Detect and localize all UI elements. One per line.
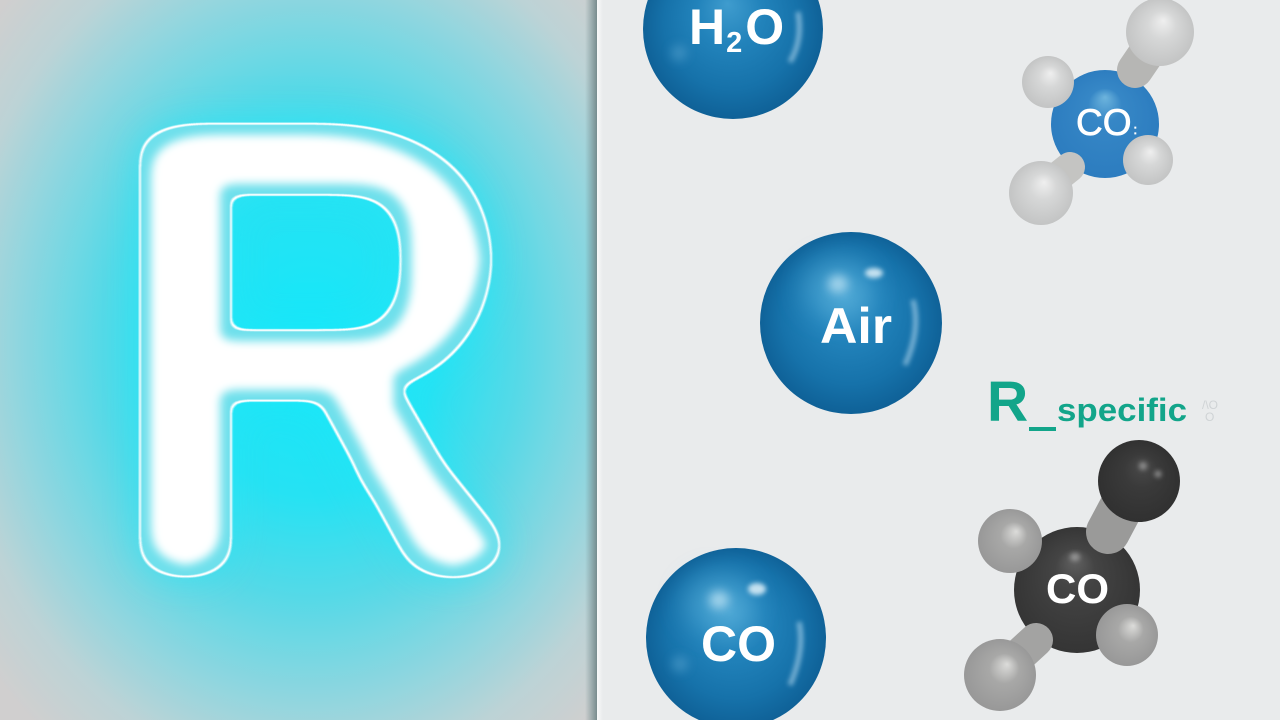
faint mark: O [1205, 410, 1214, 424]
sphere: H2O [643, 0, 823, 119]
faint mark [1202, 398, 1218, 424]
faint mark: /\O [1202, 398, 1218, 412]
heading: R_specific: specific [1057, 392, 1187, 428]
label: CO2: : [1134, 122, 1137, 137]
label: CO: CO [701, 616, 776, 672]
label: H2O: 2 [726, 27, 742, 59]
sphere: CO [646, 548, 826, 720]
sphere: Air [760, 232, 942, 414]
label: CO: CO [1046, 565, 1109, 612]
neon letter R: R [115, 0, 513, 702]
panel: molecules background [597, 0, 1280, 720]
heading: R_specific [987, 370, 1187, 434]
panel: neon R background [0, 0, 597, 720]
label: H2O: O [745, 0, 784, 55]
label: Air: Air [820, 298, 892, 354]
heading: R_specific: R [987, 370, 1028, 434]
molecule: CO2 [1009, 0, 1194, 225]
label: H2O: H [689, 0, 725, 55]
label: CO2: CO [1076, 102, 1132, 143]
molecule: CO [964, 440, 1180, 711]
